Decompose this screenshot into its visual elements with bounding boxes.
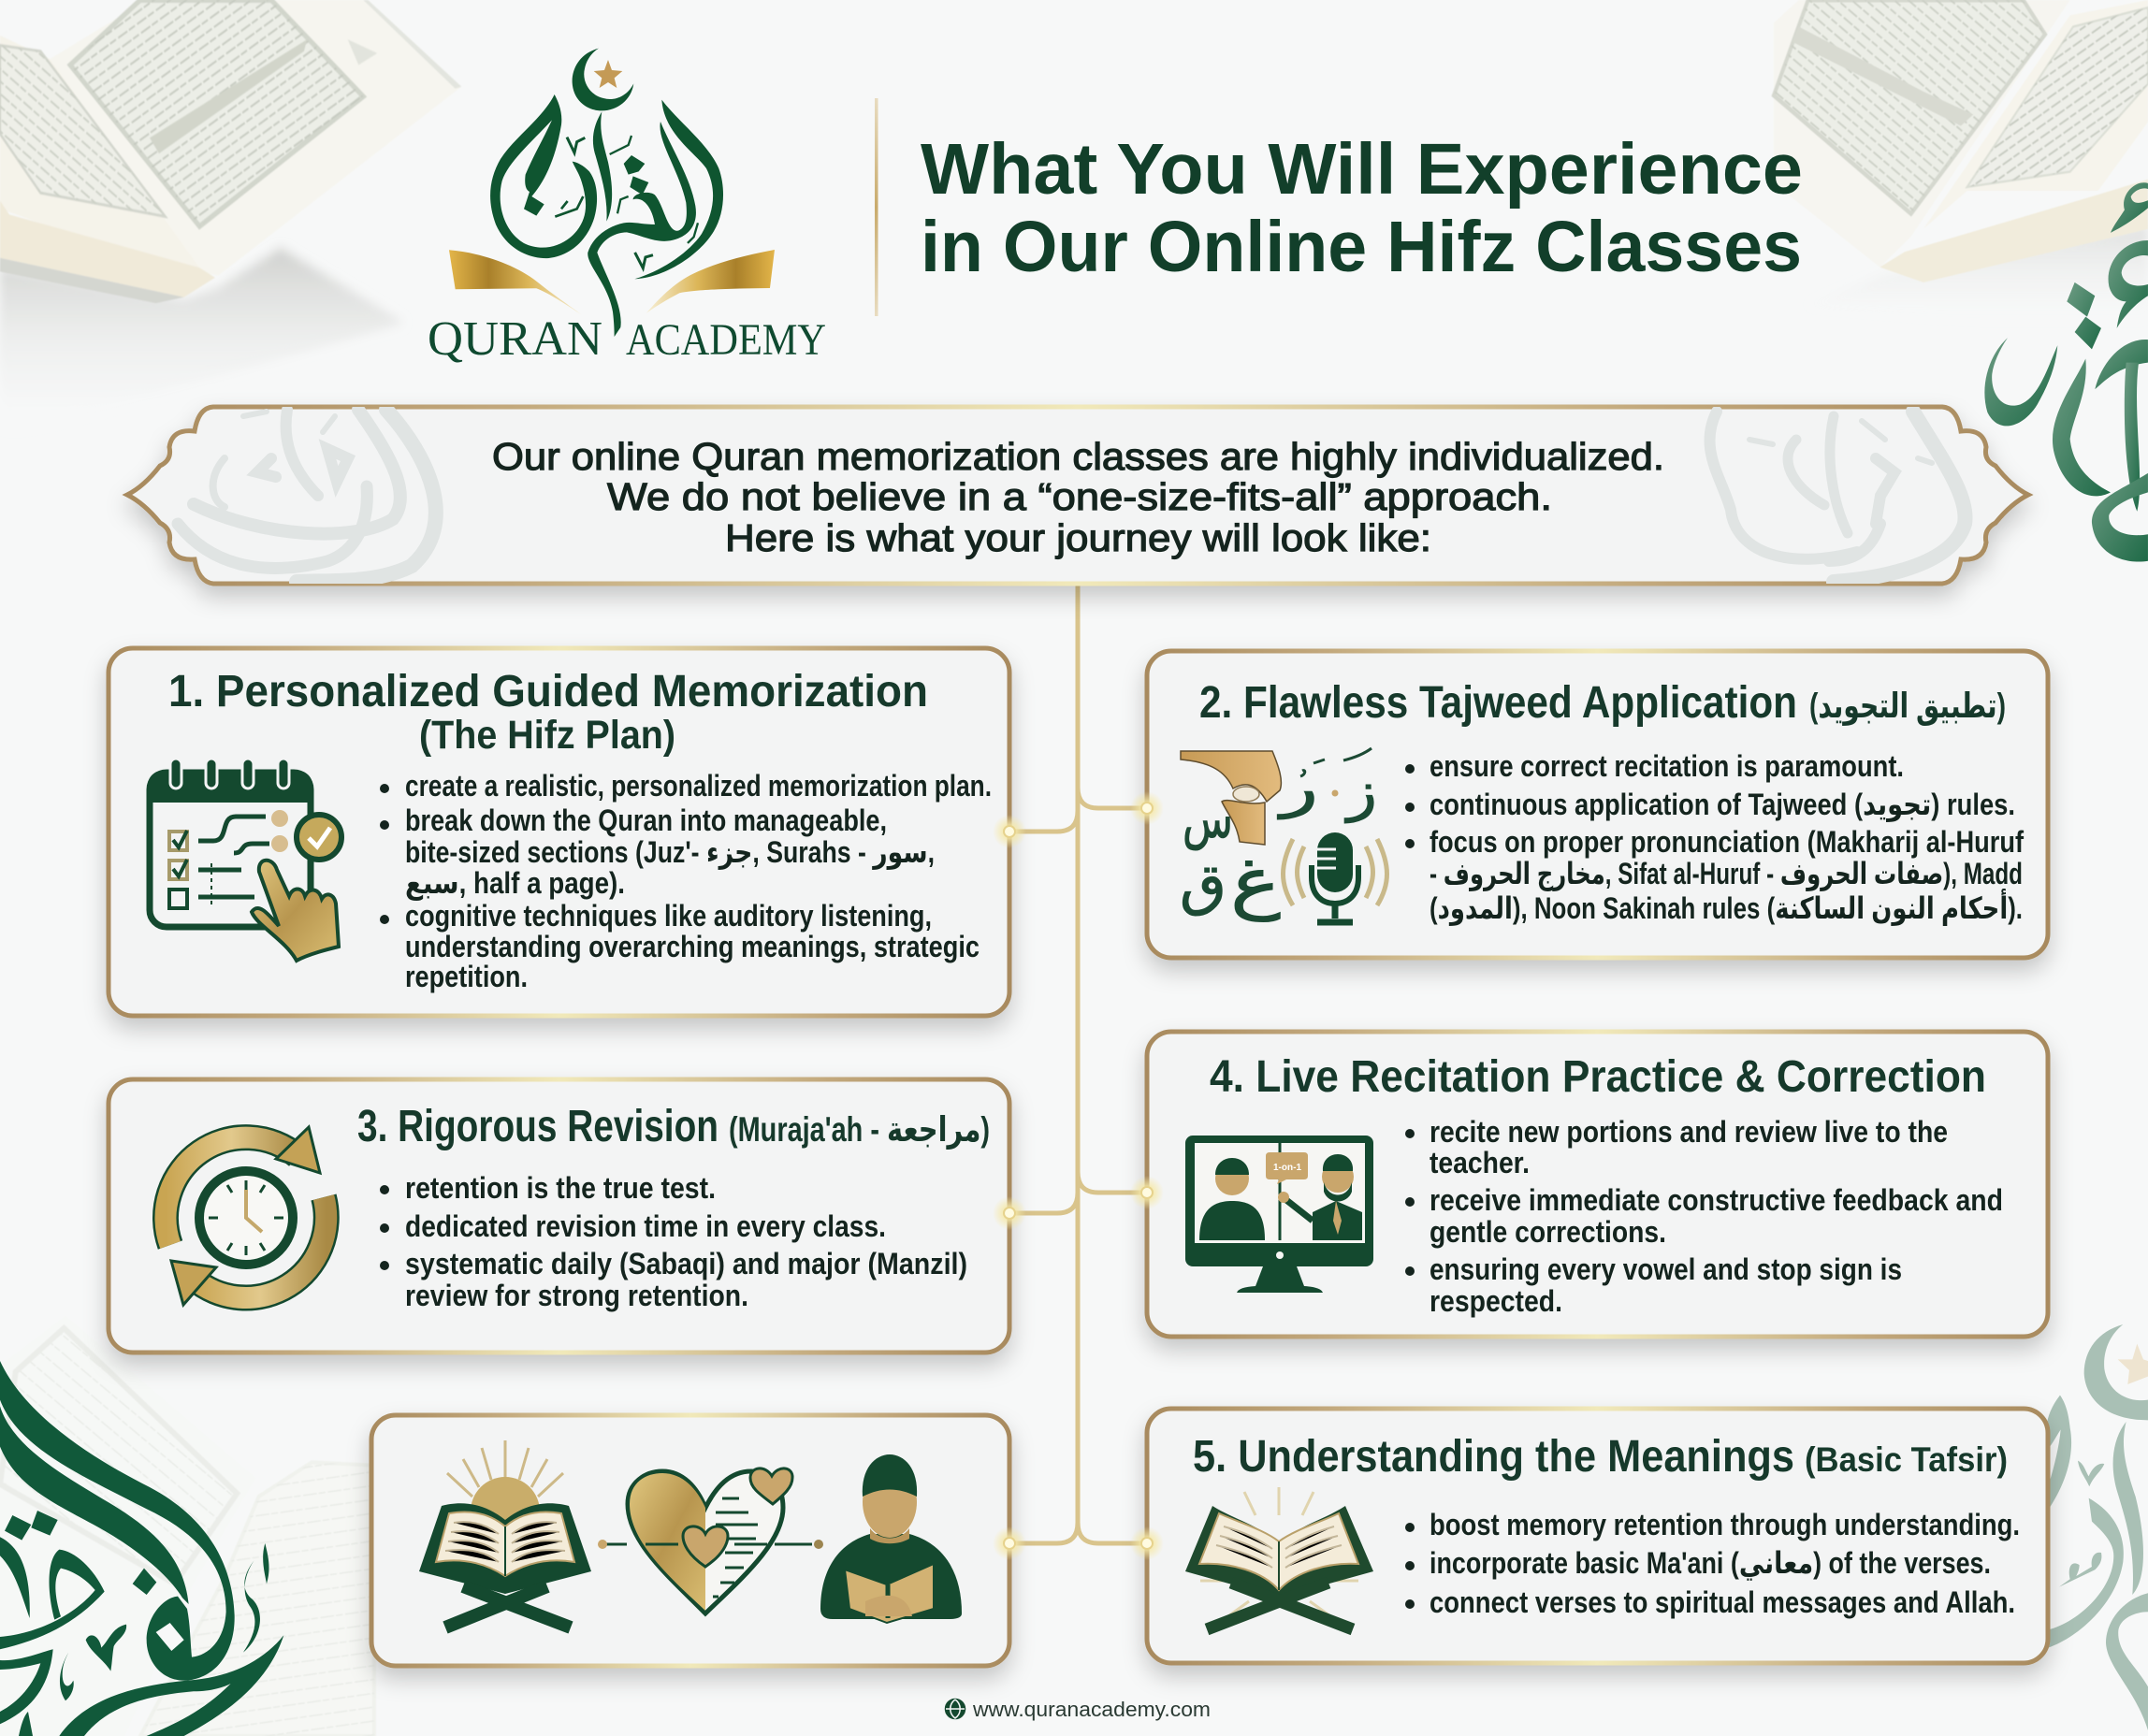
icon: mouth, arabic letters and microphone: ز [1344, 760, 1377, 823]
bullets 4: ensuring every vowel and stop sign is [1430, 1252, 1902, 1286]
logo: Quran Academy [428, 49, 826, 366]
bullets 4: recite new portions and review live to the [1430, 1115, 1948, 1149]
title: in Our Online Hifz Classes [921, 207, 1802, 287]
background: calligraphy top right [1984, 182, 2148, 562]
bullets 1: understanding overarching meanings, strategic [405, 930, 980, 963]
icon: globe [946, 1700, 965, 1718]
logo emblem [449, 49, 775, 337]
connector glow nodes [993, 791, 1164, 1560]
bullets 2: ensure correct recitation is paramount. [1430, 749, 1904, 783]
bullets 1: cognitive techniques like auditory listening, [405, 899, 932, 933]
background: open book top right [1774, 0, 2148, 325]
bullets 2: - مخارج الحروف, Sifat al-Huruf - صفات الحروف), Madd [1430, 857, 2023, 891]
icon: monitor with student and teacher [1185, 1136, 1373, 1293]
panel: 4 live recitation practice and correction [1147, 1032, 2048, 1337]
heading 2: 2. Flawless Tajweed Application [1199, 678, 1797, 728]
bullets 4: gentle corrections. [1430, 1215, 1666, 1249]
banner text: Here is what your journey will look like: [725, 516, 1431, 559]
bullets 3: systematic daily (Sabaqi) and major (Manzil) [405, 1247, 967, 1280]
heading 5: 5. Understanding the Meanings [1193, 1432, 1794, 1482]
bullets 5 [1405, 1508, 2020, 1619]
bullets 1: create a realistic, personalized memorization plan. [405, 769, 992, 803]
bullets 1: bite-sized sections (Juz'- جزء, Surahs - سور, [405, 835, 935, 870]
bullets 1 [380, 769, 992, 993]
panel: 3 rigorous revision [109, 1079, 1009, 1353]
icon: mouth, arabic letters and microphone: غ [1230, 843, 1281, 922]
bullets 3: review for strong retention. [405, 1279, 748, 1312]
panel: illustration of quran, heart and reader [371, 1415, 1009, 1666]
background: open book top left [0, 0, 461, 433]
bullets 1: break down the Quran into manageable, [405, 803, 887, 837]
bullets 2: (المدود), Noon Sakinah rules (أحكام النون الساكنة). [1430, 889, 2023, 926]
heading 3: 3. Rigorous Revision [357, 1102, 718, 1151]
bullets 1: repetition. [405, 960, 528, 993]
heading 3: (Muraja'ah - مراجعة) [729, 1110, 990, 1150]
bullets 5: connect verses to spiritual messages and Allah. [1430, 1585, 2015, 1619]
heading 5: (Basic Tafsir) [1805, 1440, 2008, 1479]
heading 1: (The Hifz Plan) [419, 713, 675, 758]
icon: mouth, arabic letters and microphone: س [1183, 787, 1233, 850]
panel: 1 personalized guided memorization [109, 648, 1009, 1016]
connector lines [1009, 585, 1147, 1543]
bullets 2: continuous application of Tajweed (تجويد) rules. [1430, 788, 2015, 822]
heading 1: 1. Personalized Guided Memorization [168, 667, 928, 716]
background: calligraphy bottom right [2045, 1324, 2148, 1730]
title [921, 129, 1803, 287]
panel: 5 understanding the meanings [1147, 1409, 2048, 1663]
icon: open quran on stand [1185, 1487, 1373, 1629]
icon: reader with open book [820, 1454, 962, 1623]
icon: calendar and pointing hand [147, 759, 341, 961]
heading 4: 4. Live Recitation Practice & Correction [1210, 1052, 1986, 1102]
bullets 2: focus on proper pronunciation (Makharij al-Huruf [1430, 825, 2024, 859]
banner text [492, 435, 1664, 559]
bullets 5: boost memory retention through understanding. [1430, 1508, 2020, 1541]
banner watermark left [178, 410, 436, 582]
bullets 1: سبع, half a page). [405, 866, 625, 901]
logo: Quran Academy: ACADEMY [626, 315, 826, 365]
bullets 3: retention is the true test. [405, 1171, 716, 1205]
bullets 4: respected. [1430, 1284, 1562, 1318]
title: What You Will Experience [921, 129, 1803, 210]
background: open book bottom left [0, 1316, 374, 1736]
icon: clock with revision arrows [166, 1127, 327, 1305]
background: calligraphy bottom left [0, 1361, 283, 1736]
intro banner [127, 407, 2028, 584]
bullets 4: teacher. [1430, 1146, 1530, 1179]
bullets 4 [1405, 1115, 2003, 1318]
icon: monitor with student and teacher: 1-on-1 [1273, 1163, 1301, 1173]
logo wordmark: QURAN [428, 312, 602, 366]
icon: mouth, arabic letters and microphone: ر [1277, 756, 1318, 819]
heading 2: (تطبيق التجويد) [1809, 687, 2006, 726]
heading 1 [168, 667, 928, 758]
banner text: We do not believe in a “one-size-fits-all” approach. [607, 475, 1552, 518]
bullets 3 [380, 1171, 967, 1312]
icon: quran on stand with sunrise [419, 1440, 591, 1628]
bullets 5: incorporate basic Ma'ani (معاني) of the verses. [1430, 1546, 1991, 1581]
banner watermark right [1709, 412, 1966, 582]
bullets 3: dedicated revision time in every class. [405, 1209, 886, 1243]
bullets 4: receive immediate constructive feedback and [1430, 1183, 2003, 1217]
footer website: www.quranacademy.com [972, 1698, 1211, 1721]
icon: heart with dotted line [598, 1468, 823, 1613]
bullets 2 [1405, 749, 2024, 926]
icon: mouth, arabic letters and microphone: ق [1180, 852, 1226, 918]
panel: 2 flawless tajweed application [1147, 651, 2048, 958]
icon: mouth, arabic letters and microphone [1180, 748, 1386, 922]
banner text: Our online Quran memorization classes are highly individualized. [492, 435, 1664, 478]
